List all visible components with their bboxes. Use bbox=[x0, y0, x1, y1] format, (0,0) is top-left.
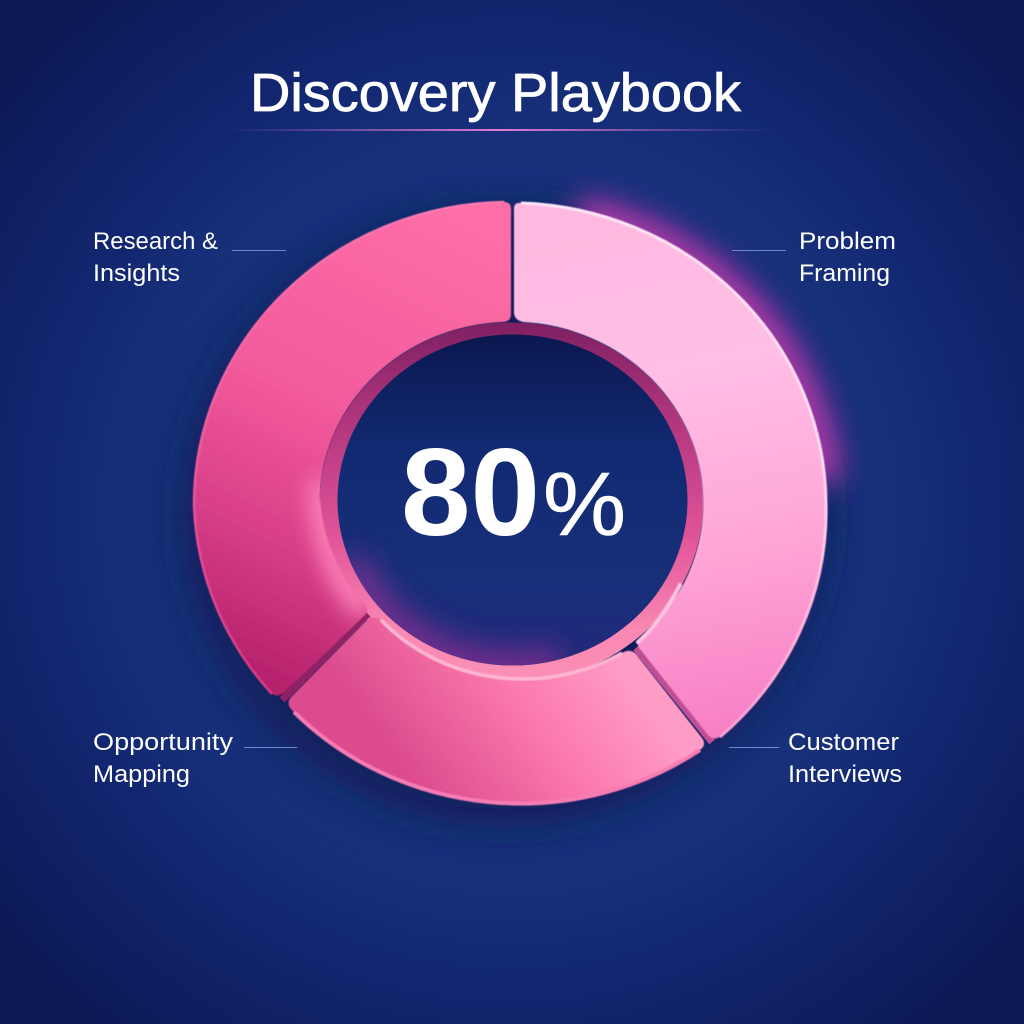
center hole bbox=[338, 334, 688, 668]
label: customer interviews: Customer bbox=[788, 729, 899, 756]
label: opportunity mapping bbox=[93, 729, 297, 788]
label: research and insights: Research & bbox=[93, 228, 218, 255]
label: research and insights bbox=[93, 228, 286, 287]
label: customer interviews: Interviews bbox=[788, 761, 902, 788]
donut chart bbox=[194, 202, 826, 804]
ring drop shadow bbox=[180, 203, 830, 827]
label: customer interviews bbox=[729, 729, 902, 788]
label: problem framing: Framing bbox=[799, 260, 890, 287]
label: opportunity mapping: Mapping bbox=[93, 761, 190, 788]
label: research and insights: Insights bbox=[93, 260, 180, 287]
segment: problem framing bbox=[514, 203, 826, 739]
label: problem framing: Problem bbox=[799, 228, 896, 255]
segment: opportunity mapping bbox=[288, 618, 704, 804]
center value: % bbox=[543, 455, 626, 555]
label: problem framing bbox=[732, 228, 896, 287]
center value bbox=[401, 424, 626, 562]
title underline bbox=[225, 129, 775, 131]
segment joints bbox=[282, 614, 712, 742]
title: Discovery Playbook bbox=[250, 63, 742, 123]
inner rim of ring bbox=[320, 322, 703, 682]
center value: 80 bbox=[401, 424, 540, 562]
pink glow behind upper right of ring bbox=[590, 215, 824, 470]
segment: research and insights bbox=[194, 202, 511, 696]
label: opportunity mapping: Opportunity bbox=[93, 729, 233, 756]
